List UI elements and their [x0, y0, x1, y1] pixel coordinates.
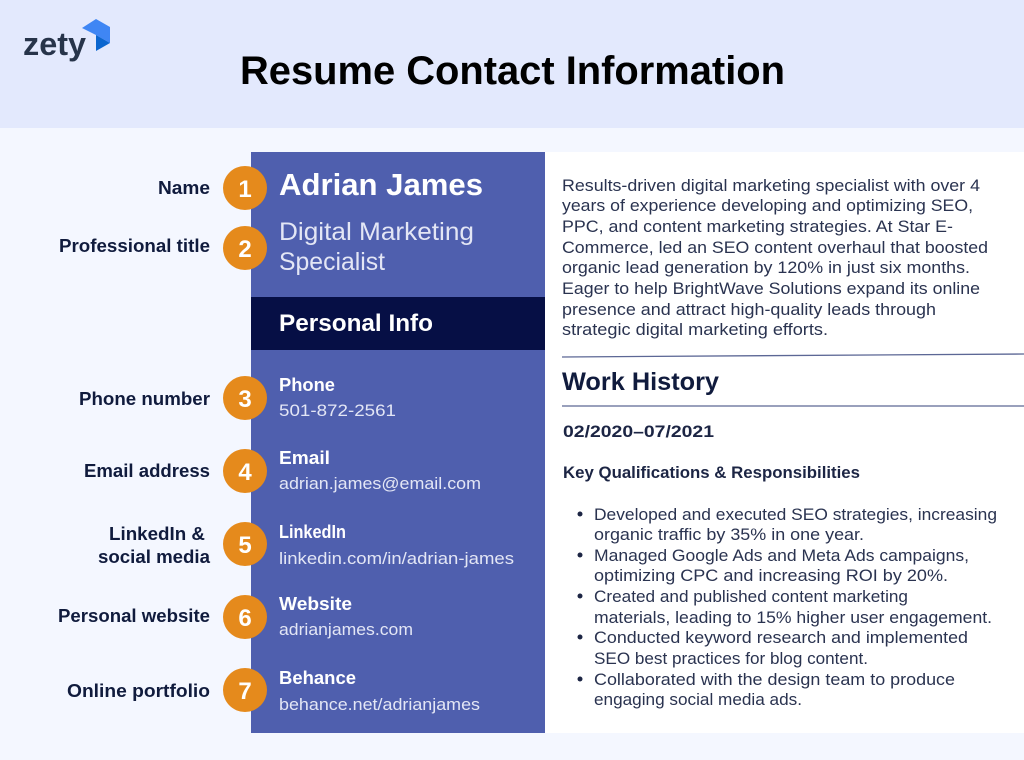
bullet list: materials, leading to 15% higher user engagement. [594, 608, 992, 627]
bullet list: Created and published content marketing [594, 587, 908, 606]
bullet list [578, 505, 997, 709]
panel: resume main [545, 152, 1024, 733]
behance entry: Behance [279, 667, 356, 688]
badge 7: 7 [238, 678, 252, 705]
label: email address: Email address [84, 461, 210, 481]
linkedin entry [279, 521, 514, 568]
badge 5: 5 [238, 532, 252, 559]
linkedin entry: LinkedIn [279, 521, 346, 542]
linkedin entry: linkedin.com/in/adrian-james [279, 550, 514, 568]
bullet list: Managed Google Ads and Meta Ads campaigns, [594, 546, 969, 565]
bullet list: organic traffic by 35% in one year. [594, 525, 864, 544]
bullet list: Collaborated with the design team to produce [594, 670, 955, 689]
website entry: Website [279, 593, 352, 614]
professional title: Digital Marketing [279, 218, 474, 246]
bullet list: engaging social media ads. [594, 690, 802, 709]
logo: zety: zety [23, 26, 86, 62]
summary paragraph: presence and attract high-quality leads through [562, 300, 936, 319]
summary paragraph: organic lead generation by 120% in just six months. [562, 258, 970, 277]
phone entry: Phone [279, 374, 335, 395]
label: personal website: Personal website [58, 606, 210, 626]
label: name: Name [158, 178, 210, 198]
logo: zety [23, 19, 110, 62]
email entry: Email [279, 447, 330, 468]
title: Resume Contact Information [240, 49, 785, 93]
summary paragraph: years of experience developing and optimizing SEO, [562, 196, 973, 215]
summary paragraph: PPC, and content marketing strategies. At Star E- [562, 217, 953, 236]
summary paragraph: Eager to help BrightWave Solutions expand its online [562, 279, 980, 298]
label: linkedin and social media [98, 524, 211, 567]
professional title: Specialist [279, 248, 385, 276]
badge 1: 1 [238, 176, 252, 203]
website entry: adrianjames.com [279, 621, 413, 639]
header band [0, 0, 1024, 128]
badge 7 [223, 668, 267, 712]
phone entry [279, 374, 396, 420]
subheading: Key Qualifications & Responsibilities [563, 464, 860, 482]
summary paragraph: Commerce, led an SEO content overhaul that boosted [562, 238, 988, 257]
badge 5 [223, 522, 267, 566]
badge 6: 6 [238, 605, 252, 632]
phone entry: 501-872-2561 [279, 402, 396, 420]
summary paragraph: Results-driven digital marketing specialist with over 4 [562, 176, 980, 195]
badge 1 [223, 166, 267, 210]
label: online portfolio: Online portfolio [67, 681, 210, 701]
behance entry: behance.net/adrianjames [279, 696, 480, 714]
bullet list: Developed and executed SEO strategies, increasing [594, 505, 997, 524]
professional title [279, 218, 474, 276]
badge 6 [223, 595, 267, 639]
website entry [279, 593, 413, 639]
work history heading: Work History [562, 368, 719, 396]
personal info band [251, 297, 545, 350]
badge 3 [223, 376, 267, 420]
email entry [279, 447, 481, 493]
name: Adrian James [279, 167, 483, 202]
personal info heading: Personal Info [279, 310, 433, 337]
badge 2: 2 [238, 236, 252, 263]
label: professional title: Professional title [59, 236, 210, 256]
summary paragraph [562, 176, 988, 339]
badge 3: 3 [238, 386, 252, 413]
bullet list: optimizing CPC and increasing ROI by 20%. [594, 566, 948, 585]
email entry: adrian.james@email.com [279, 475, 481, 493]
bullet list: Conducted keyword research and implemented [594, 628, 968, 647]
behance entry [279, 667, 480, 714]
label: linkedin and social media: LinkedIn & [109, 524, 205, 544]
badge 4: 4 [238, 459, 252, 486]
employment dates: 02/2020–07/2021 [563, 422, 714, 441]
badge 4 [223, 449, 267, 493]
badge 2 [223, 226, 267, 270]
panel: resume sidebar [251, 152, 545, 733]
label: linkedin and social media: social media [98, 547, 211, 567]
label: phone number: Phone number [79, 389, 210, 409]
summary paragraph: strategic digital marketing efforts. [562, 320, 828, 339]
bullet list: SEO best practices for blog content. [594, 649, 868, 668]
